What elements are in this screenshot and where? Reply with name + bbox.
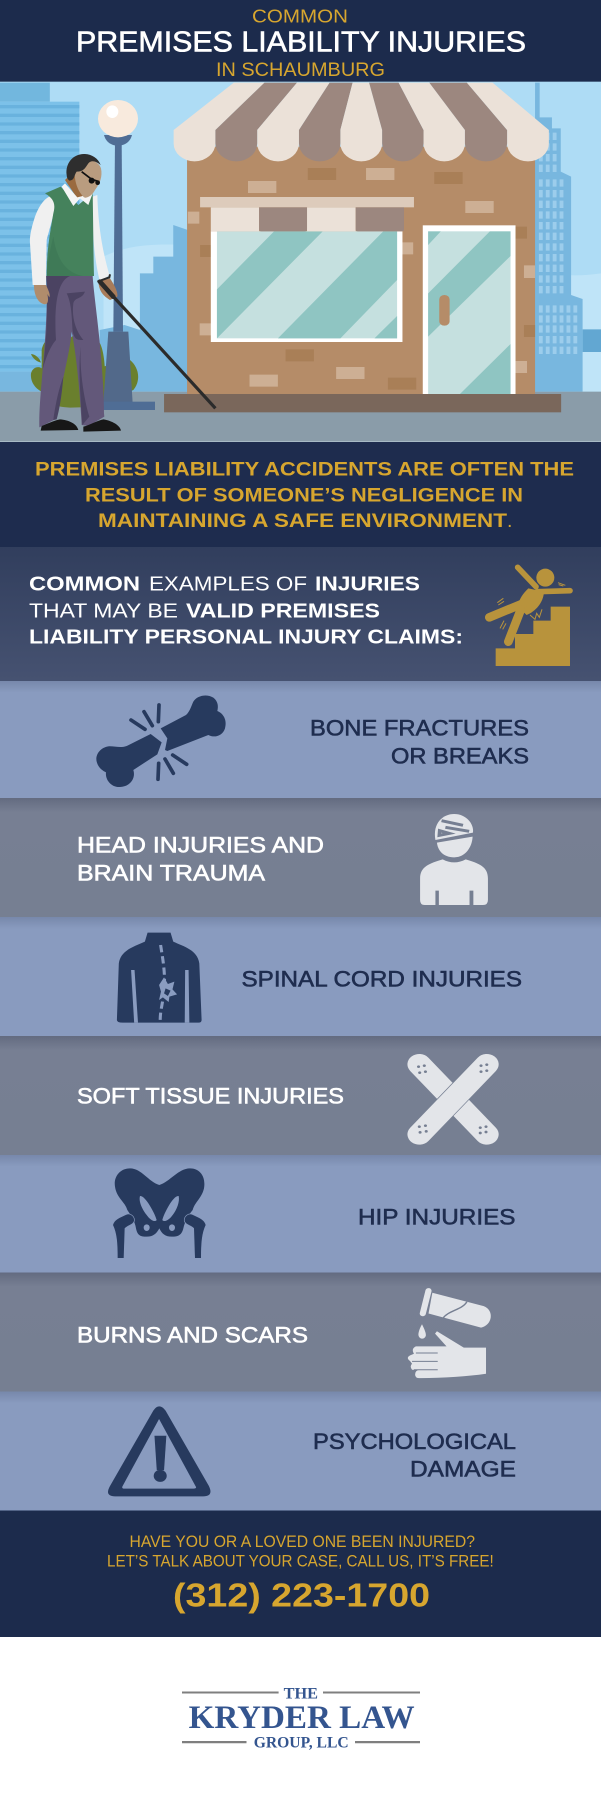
footer: white area with logo <box>0 1637 601 1795</box>
icon: pelvis <box>113 1168 206 1258</box>
white cane <box>100 282 215 408</box>
statement banner: PREMISES LIABILITY ACCIDENTS ARE OFTEN THE <box>35 459 574 481</box>
intro text: LIABILITY PERSONAL INJURY CLAIMS: <box>29 626 463 649</box>
call to action banner: LET’S TALK ABOUT YOUR CASE, CALL US, IT’S FREE! <box>107 1552 494 1570</box>
pavement <box>0 392 601 442</box>
icon: crossed bandages <box>417 1063 488 1134</box>
shop step <box>164 394 561 412</box>
icon: bandaged head <box>420 814 488 905</box>
label <box>310 716 529 768</box>
label: BONE FRACTURES <box>310 716 529 741</box>
icon: chemical over hand <box>408 1291 491 1378</box>
call to action banner: HAVE YOU OR A LOVED ONE BEEN INJURED? <box>130 1533 475 1551</box>
left skyscraper <box>0 83 79 372</box>
intro text <box>29 572 463 649</box>
shop wall <box>187 147 535 395</box>
heading: common: COMMON <box>252 6 348 27</box>
icon: back with spine <box>117 933 202 1023</box>
panel: common examples <box>0 547 601 681</box>
scene illustration: storefront with blind man <box>0 82 601 442</box>
logo: the kryder law group: THE <box>284 1686 318 1702</box>
intro text: EXAMPLES OF <box>149 572 307 595</box>
label: PSYCHOLOGICAL <box>313 1429 516 1454</box>
man <box>30 154 121 432</box>
label <box>313 1429 516 1482</box>
panel: soft tissue <box>0 1036 601 1155</box>
roof awning <box>174 83 549 161</box>
street lamp <box>98 100 155 410</box>
main title: PREMISES LIABILITY INJURIES <box>76 27 526 59</box>
statement banner: MAINTAINING A SAFE ENVIRONMENT <box>98 510 507 532</box>
window with small awning <box>200 197 414 342</box>
panel: spinal cord <box>0 917 601 1036</box>
label: BRAIN TRAUMA <box>77 861 265 886</box>
heading: in schaumburg: IN SCHAUMBURG <box>216 59 385 81</box>
panel: psychological damage <box>0 1392 601 1510</box>
panel: burns and scars <box>0 1272 601 1392</box>
statement banner <box>0 442 601 547</box>
statement banner: RESULT OF SOMEONE’S NEGLIGENCE IN <box>85 485 523 507</box>
door <box>423 225 516 394</box>
label: BURNS AND SCARS <box>77 1323 308 1348</box>
label: SOFT TISSUE INJURIES <box>77 1083 344 1108</box>
logo: the kryder law group: KRYDER LAW <box>189 1700 415 1736</box>
bush <box>31 335 138 408</box>
intro text: VALID PREMISES <box>186 600 380 623</box>
label: DAMAGE <box>410 1457 516 1482</box>
panel: head injuries <box>0 798 601 917</box>
back buildings <box>0 225 188 392</box>
label: OR BREAKS <box>391 743 529 768</box>
statement banner: . <box>507 510 512 532</box>
intro text: COMMON <box>29 572 140 595</box>
label: SPINAL CORD INJURIES <box>242 967 522 992</box>
panel: bone fractures <box>0 681 601 798</box>
intro text: INJURIES <box>315 572 420 595</box>
label: HIP INJURIES <box>358 1204 516 1229</box>
icon: warning triangle <box>108 1406 210 1496</box>
phone number: (312) 223-1700 <box>173 1576 430 1614</box>
call to action banner <box>0 1510 601 1637</box>
icon: person falling on stairs <box>489 567 570 666</box>
header banner <box>0 0 601 82</box>
label <box>77 833 324 886</box>
icon: broken bone <box>96 695 226 787</box>
intro text: THAT MAY BE <box>29 600 178 623</box>
label: HEAD INJURIES AND <box>77 833 324 858</box>
right skyscraper <box>535 83 583 392</box>
panel: hip injuries <box>0 1155 601 1272</box>
logo: the kryder law group: GROUP, LLC <box>254 1735 349 1752</box>
foreground figures <box>30 100 155 432</box>
logo: the kryder law group <box>182 1686 420 1752</box>
